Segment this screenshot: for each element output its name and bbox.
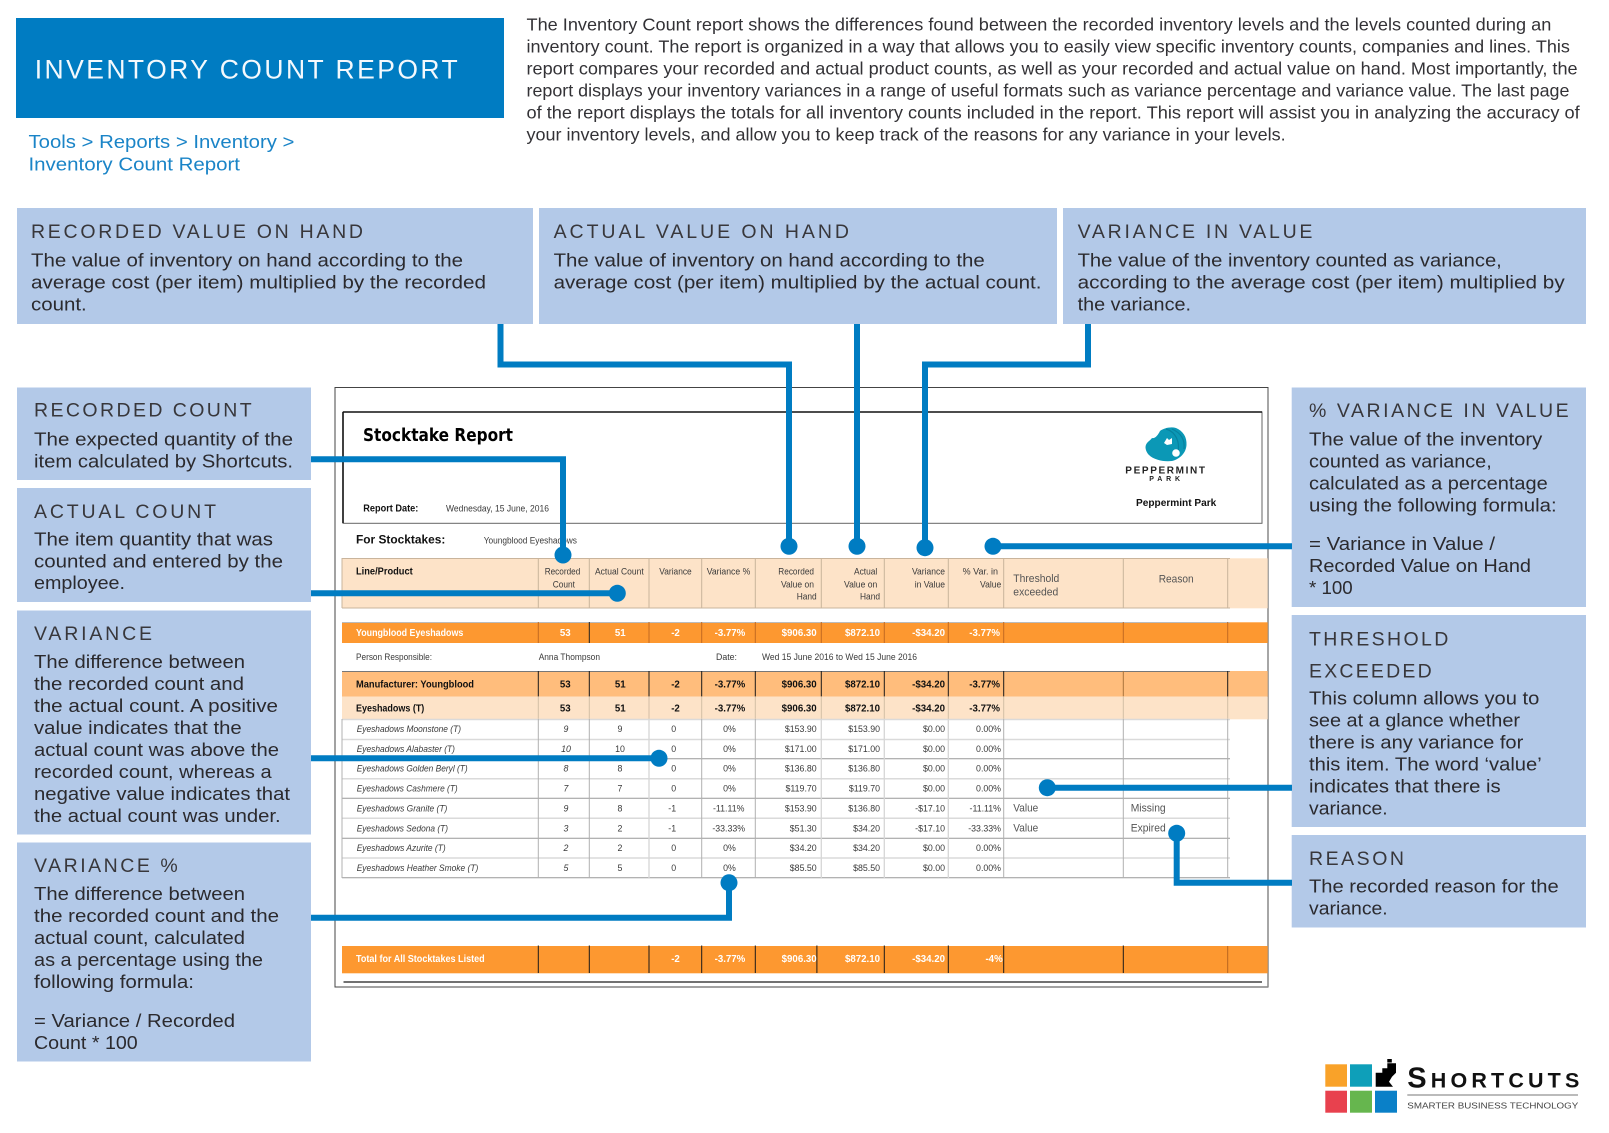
arrow: recorded value on hand xyxy=(500,324,798,555)
description: recorded value on hand: count. xyxy=(31,294,87,314)
manufacturer row: 53 xyxy=(560,680,571,691)
description: variance: value indicates that the xyxy=(34,718,242,738)
description: threshold exceeded: this item. The word ‘value’ xyxy=(1309,754,1542,774)
group row: youngblood eyeshadows: -3.77% xyxy=(969,628,1000,639)
item: cashmere: Eyeshadows Cashmere (T) xyxy=(357,784,458,794)
table header row: Actual xyxy=(854,567,877,577)
breadcrumb navigation path: Tools > Reports > Inventory > xyxy=(28,132,294,152)
item: sedona: -1 xyxy=(668,824,676,834)
item: cashmere: $0.00 xyxy=(923,784,945,794)
arrow: threshold exceeded xyxy=(1039,779,1292,796)
manufacturer row: $906.30 xyxy=(782,680,817,691)
intro paragraph: of the report displays the totals for all inventory counts included in the report. This report will assist you in analyzing the accuracy of xyxy=(526,102,1580,122)
description: variance percent: following formula: xyxy=(34,972,194,992)
description: reason: variance. xyxy=(1309,899,1388,919)
description: variance percent: The difference between xyxy=(34,884,245,904)
total row: -2 xyxy=(671,954,680,965)
item: alabaster: $171.00 xyxy=(848,744,880,754)
item: heather smoke: $85.50 xyxy=(853,863,880,873)
tagline: SMARTER BUSINESS TECHNOLOGY xyxy=(1407,1100,1579,1110)
breadcrumb navigation path xyxy=(28,132,294,174)
for stocktakes line xyxy=(356,532,578,546)
manufacturer row: -2 xyxy=(671,680,680,691)
description: variance: the recorded count and xyxy=(34,674,244,694)
item: cashmere: $119.70 xyxy=(849,784,880,794)
description: threshold exceeded: This column allows you to xyxy=(1309,688,1539,708)
item: granite: 9 xyxy=(564,804,569,814)
panel: recorded value on hand xyxy=(17,208,533,324)
arrow: variance xyxy=(311,750,668,767)
heading: threshold exceeded: EXCEEDED xyxy=(1309,660,1432,682)
item: azurite: $34.20 xyxy=(790,843,817,853)
description: reason: The recorded reason for the xyxy=(1309,877,1559,897)
item: granite: $153.90 xyxy=(785,804,817,814)
description: actual count: employee. xyxy=(34,573,125,593)
item: moonstone: 0 xyxy=(671,724,676,734)
item: sedona: $34.20 xyxy=(853,824,880,834)
item: alabaster: $171.00 xyxy=(785,744,817,754)
item: moonstone: $153.90 xyxy=(785,724,817,734)
item: azurite: 2 xyxy=(563,843,569,853)
description: percent variance in value: counted as variance, xyxy=(1309,451,1492,471)
heading: reason: REASON xyxy=(1309,848,1404,870)
group row: youngblood eyeshadows: -2 xyxy=(671,628,680,639)
arrow: recorded count xyxy=(311,459,572,564)
person responsible row xyxy=(356,652,917,662)
description: variance: negative value indicates that xyxy=(34,784,290,804)
item: heather smoke xyxy=(357,863,1001,873)
item: alabaster: $0.00 xyxy=(923,744,945,754)
person responsible row: Wed 15 June 2016 to Wed 15 June 2016 xyxy=(762,652,917,662)
item: azurite: $0.00 xyxy=(923,843,945,853)
panel: variance percent xyxy=(17,842,311,1062)
table header row: Count xyxy=(553,579,576,589)
item: moonstone: 9 xyxy=(618,724,623,734)
person responsible row: Person Responsible: xyxy=(356,652,432,662)
heading: variance in value: VARIANCE IN VALUE xyxy=(1078,221,1312,243)
table header row: Variance xyxy=(659,567,692,577)
item: sedona: -33.33% xyxy=(712,824,745,834)
intro paragraph: The Inventory Count report shows the differences found between the recorded inventory levels and the levels counted during an xyxy=(526,14,1551,34)
item: heather smoke: 0.00% xyxy=(976,863,1001,873)
report date: Report Date: xyxy=(363,504,418,515)
item: azurite: 2 xyxy=(618,843,623,853)
item: golden beryl: 0% xyxy=(723,764,736,774)
description: variance percent xyxy=(34,884,279,1053)
item: golden beryl: 0.00% xyxy=(976,764,1001,774)
item: cashmere xyxy=(357,784,1001,794)
report date xyxy=(363,504,549,515)
description: recorded count: The expected quantity of the xyxy=(34,430,293,450)
group row: youngblood eyeshadows xyxy=(342,622,1268,643)
description: actual value on hand xyxy=(554,250,1042,292)
heading: actual value on hand: ACTUAL VALUE ON HAND xyxy=(554,221,849,243)
table header row xyxy=(342,558,1268,608)
item: azurite xyxy=(357,843,1001,853)
item: sedona: 3 xyxy=(564,824,569,834)
description: actual value on hand: average cost (per item) multiplied by the actual count. xyxy=(554,272,1042,292)
panel: threshold exceeded xyxy=(1292,615,1586,827)
description: variance in value: the variance. xyxy=(1078,294,1191,314)
manufacturer row: $872.10 xyxy=(845,680,880,691)
report date: Wednesday, 15 June, 2016 xyxy=(446,504,549,514)
panel: recorded count xyxy=(17,388,311,480)
item: golden beryl: 8 xyxy=(564,764,569,774)
group row: youngblood eyeshadows: Youngblood Eyeshadows xyxy=(356,628,463,639)
item: alabaster: 0.00% xyxy=(976,744,1001,754)
intro paragraph: your inventory levels, and allow you to keep track of the reasons for any variance in your levels. xyxy=(526,124,1286,144)
item: golden beryl: $136.80 xyxy=(848,764,880,774)
table header row: % Var. in xyxy=(963,567,998,577)
breadcrumb navigation path: Inventory Count Report xyxy=(28,154,240,174)
report screenshot: stocktake report xyxy=(335,388,1268,987)
total row: Total for All Stocktakes Listed xyxy=(356,954,485,965)
description: threshold exceeded: indicates that there is xyxy=(1309,776,1501,796)
item: heather smoke: 0 xyxy=(671,863,676,873)
item: moonstone xyxy=(357,724,1001,734)
total row xyxy=(342,946,1268,973)
description: variance percent: actual count, calculated xyxy=(34,928,245,948)
total row: -4% xyxy=(985,954,1003,965)
icon: peppermint park logo: PARK xyxy=(1149,476,1180,483)
report header box xyxy=(343,412,1262,523)
heading: percent variance in value: % VARIANCE IN VALUE xyxy=(1309,400,1569,422)
description: percent variance in value: using the following formula: xyxy=(1309,495,1557,515)
description: reason xyxy=(1309,877,1559,919)
arrow: variance percent xyxy=(311,874,738,918)
description: variance in value xyxy=(1078,250,1566,314)
description: threshold exceeded: variance. xyxy=(1309,798,1388,818)
item: heather smoke: $0.00 xyxy=(923,863,945,873)
category row: eyeshadows: 53 xyxy=(560,703,571,714)
description: threshold exceeded xyxy=(1309,688,1542,818)
table header row: Value xyxy=(980,579,1001,589)
table header row: Variance % xyxy=(707,567,750,577)
table header row: Threshold xyxy=(1013,573,1059,585)
table header row: Hand xyxy=(860,592,880,602)
total row: $906.30 xyxy=(782,954,817,965)
icon: peppermint park logo: Peppermint Park xyxy=(1136,498,1217,509)
panel: variance in value xyxy=(1063,208,1586,324)
item: golden beryl: 8 xyxy=(618,764,623,774)
item: alabaster: 10 xyxy=(561,744,571,754)
table header row: Actual Count xyxy=(595,567,644,577)
group row: youngblood eyeshadows: 51 xyxy=(615,628,626,639)
item: sedona: -$17.10 xyxy=(915,824,945,834)
category row: eyeshadows: $872.10 xyxy=(845,703,880,714)
description: percent variance in value: * 100 xyxy=(1309,578,1353,598)
item: sedona: Expired xyxy=(1131,822,1166,834)
manufacturer row xyxy=(342,671,1268,697)
report title: Stocktake Report xyxy=(363,425,513,446)
item: sedona: -33.33% xyxy=(968,824,1001,834)
item: cashmere: $119.70 xyxy=(786,784,817,794)
item: golden beryl: $0.00 xyxy=(923,764,945,774)
manufacturer row: -3.77% xyxy=(715,680,746,691)
table header row: Value on xyxy=(844,579,877,589)
intro paragraph: inventory count. The report is organized in a way that allows you to easily view specific inventory counts, companies and lines. This xyxy=(526,36,1570,56)
item: azurite: 0% xyxy=(723,843,736,853)
item: sedona: Eyeshadows Sedona (T) xyxy=(357,824,448,834)
description: actual value on hand: The value of inventory on hand according to the xyxy=(554,250,985,270)
item: granite: 8 xyxy=(618,804,623,814)
description: percent variance in value: calculated as a percentage xyxy=(1309,473,1548,493)
panel: variance xyxy=(17,610,311,834)
item: granite: $136.80 xyxy=(848,804,880,814)
description: variance percent: = Variance / Recorded xyxy=(34,1011,235,1031)
total row: $872.10 xyxy=(845,954,880,965)
for stocktakes line: For Stocktakes: xyxy=(356,532,445,546)
item: alabaster: 0% xyxy=(723,744,736,754)
heading: recorded count: RECORDED COUNT xyxy=(34,400,252,422)
category row: eyeshadows: 51 xyxy=(615,703,626,714)
description: actual count xyxy=(34,529,283,593)
table header row: Reason xyxy=(1159,573,1194,585)
item: granite: -11.11% xyxy=(713,804,745,814)
description: actual count: The item quantity that was xyxy=(34,529,273,549)
item: azurite: $34.20 xyxy=(853,843,880,853)
intro paragraph xyxy=(526,14,1580,144)
heading: threshold exceeded: THRESHOLD xyxy=(1309,628,1448,650)
description: variance percent: Count * 100 xyxy=(34,1033,138,1053)
item: moonstone: 0.00% xyxy=(976,724,1001,734)
description: variance percent: as a percentage using the xyxy=(34,950,263,970)
item rows xyxy=(342,719,1230,878)
item: granite: Value xyxy=(1013,802,1038,814)
arrow: actual count xyxy=(311,585,626,602)
description: variance in value: according to the average cost (per item) multiplied by xyxy=(1078,272,1566,292)
logo: shortcuts xyxy=(1325,1059,1579,1113)
heading: variance percent: VARIANCE % xyxy=(34,855,178,877)
description: threshold exceeded: see at a glance whether xyxy=(1309,710,1520,730)
heading: threshold exceeded xyxy=(1309,628,1448,682)
item: granite: Eyeshadows Granite (T) xyxy=(357,804,447,814)
item: sedona: $51.30 xyxy=(790,824,817,834)
description: percent variance in value: = Variance in Value / xyxy=(1309,534,1496,554)
person responsible row: Date: xyxy=(716,652,737,662)
item: heather smoke: 5 xyxy=(618,863,623,873)
description: recorded count: item calculated by Shortcuts. xyxy=(34,452,293,472)
heading: actual count: ACTUAL COUNT xyxy=(34,501,216,523)
category row: eyeshadows: -3.77% xyxy=(969,703,1000,714)
group row: youngblood eyeshadows: $906.30 xyxy=(782,628,817,639)
group row: youngblood eyeshadows: $872.10 xyxy=(845,628,880,639)
item: heather smoke: 0% xyxy=(723,863,736,873)
description: variance: the actual count was under. xyxy=(34,806,281,826)
table header row: Value on xyxy=(781,579,814,589)
item: azurite: 0 xyxy=(671,843,676,853)
panel: reason xyxy=(1292,835,1586,928)
group row: youngblood eyeshadows: 53 xyxy=(560,628,571,639)
description: recorded value on hand: average cost (per item) multiplied by the recorded xyxy=(31,272,486,292)
total row: -3.77% xyxy=(715,954,746,965)
arrow: reason xyxy=(1168,825,1292,883)
icon: peppermint park logo xyxy=(1125,427,1217,509)
heading: variance: VARIANCE xyxy=(34,623,152,645)
item: golden beryl: Eyeshadows Golden Beryl (T) xyxy=(357,764,468,774)
table header row: exceeded xyxy=(1013,586,1058,598)
category row: eyeshadows: -2 xyxy=(671,703,680,714)
item: cashmere: 7 xyxy=(618,784,623,794)
item: alabaster: Eyeshadows Alabaster (T) xyxy=(357,744,455,754)
table header row: Variance xyxy=(912,567,945,577)
description: variance: recorded count, whereas a xyxy=(34,762,273,782)
description: recorded value on hand: The value of inventory on hand according to the xyxy=(31,250,463,270)
panel: actual value on hand xyxy=(539,208,1057,324)
item: alabaster: 0 xyxy=(671,744,676,754)
item: alabaster xyxy=(357,744,1001,754)
description: variance in value: The value of the inventory counted as variance, xyxy=(1078,250,1502,270)
item: golden beryl: 0 xyxy=(671,764,676,774)
item: cashmere: 0% xyxy=(723,784,736,794)
item: moonstone: Eyeshadows Moonstone (T) xyxy=(357,724,461,734)
wordmark: SHORTCUTS xyxy=(1407,1063,1579,1095)
item: azurite: Eyeshadows Azurite (T) xyxy=(357,843,446,853)
panel: percent variance in value xyxy=(1292,388,1586,607)
connectors: callout lines linking panels to report columns xyxy=(311,324,1292,918)
item: sedona: Value xyxy=(1013,822,1038,834)
group row: youngblood eyeshadows: -3.77% xyxy=(715,628,746,639)
description: percent variance in value xyxy=(1309,429,1557,598)
item: moonstone: 9 xyxy=(564,724,569,734)
icon: coloured squares and stairs mark xyxy=(1325,1059,1397,1113)
table header row: Line/Product xyxy=(356,567,413,578)
item: moonstone: $0.00 xyxy=(923,724,945,734)
table header row: Hand xyxy=(797,592,817,602)
arrow: actual value on hand xyxy=(848,324,866,555)
title banner xyxy=(16,18,504,118)
table header row: in Value xyxy=(915,579,945,589)
description: variance: the actual count. A positive xyxy=(34,696,278,716)
item: sedona: 2 xyxy=(618,824,623,834)
item: granite: -$17.10 xyxy=(915,804,945,814)
item: azurite: 0.00% xyxy=(976,843,1001,853)
item: granite: -11.11% xyxy=(970,804,1001,814)
item: sedona xyxy=(357,822,1166,834)
description: variance percent: the recorded count and the xyxy=(34,906,279,926)
item: heather smoke: Eyeshadows Heather Smoke (T) xyxy=(357,863,478,873)
item: heather smoke: 5 xyxy=(564,863,569,873)
category row: eyeshadows: -3.77% xyxy=(715,703,746,714)
item: granite xyxy=(357,802,1166,814)
panel: actual count xyxy=(17,488,311,602)
icon: peppermint park logo: PEPPERMINT xyxy=(1125,466,1205,477)
item: moonstone: 0% xyxy=(723,724,736,734)
item: cashmere: 0 xyxy=(671,784,676,794)
description: percent variance in value: The value of the inventory xyxy=(1309,429,1543,449)
item: granite: Missing xyxy=(1131,802,1166,814)
item: alabaster: 10 xyxy=(615,744,625,754)
group row: youngblood eyeshadows: -$34.20 xyxy=(912,628,945,639)
manufacturer row: -$34.20 xyxy=(912,680,945,691)
total row: -$34.20 xyxy=(912,954,945,965)
arrow: variance in value xyxy=(916,324,1088,556)
heading: recorded value on hand: RECORDED VALUE ON HAND xyxy=(31,221,363,243)
item: golden beryl xyxy=(357,764,1001,774)
category row: eyeshadows xyxy=(342,697,1268,719)
description: variance xyxy=(34,652,290,826)
item: heather smoke: $85.50 xyxy=(790,863,817,873)
arrow: percent variance in value xyxy=(984,538,1292,555)
table header row: Recorded xyxy=(545,567,580,577)
description: actual count: counted and entered by the xyxy=(34,551,283,571)
description: threshold exceeded: there is any variance for xyxy=(1309,732,1523,752)
item: cashmere: 0.00% xyxy=(976,784,1001,794)
for stocktakes line: Youngblood Eyeshadows xyxy=(484,535,578,545)
intro paragraph: report compares your recorded and actual product counts, as well as your recorded and actual value on hand. Most importantly, the xyxy=(526,58,1578,78)
category row: eyeshadows: Eyeshadows (T) xyxy=(356,703,424,714)
item: granite: -1 xyxy=(668,804,676,814)
description: recorded value on hand xyxy=(31,250,486,314)
description: variance: The difference between xyxy=(34,652,245,672)
manufacturer row: -3.77% xyxy=(969,680,1000,691)
category row: eyeshadows: -$34.20 xyxy=(912,703,945,714)
table header row: Recorded xyxy=(778,567,814,577)
title banner: INVENTORY COUNT REPORT xyxy=(35,55,458,85)
item: cashmere: 7 xyxy=(564,784,570,794)
manufacturer row: 51 xyxy=(615,680,626,691)
intro paragraph: report displays your inventory variances in a range of useful formats such as variance percentage and variance value. The last page xyxy=(526,80,1569,100)
description: recorded count xyxy=(34,430,293,472)
description: variance: actual count was above the xyxy=(34,740,279,760)
manufacturer row: Manufacturer: Youngblood xyxy=(356,680,474,691)
item: golden beryl: $136.80 xyxy=(785,764,817,774)
item: moonstone: $153.90 xyxy=(848,724,880,734)
person responsible row: Anna Thompson xyxy=(539,652,600,662)
category row: eyeshadows: $906.30 xyxy=(782,703,817,714)
description: percent variance in value: Recorded Value on Hand xyxy=(1309,556,1531,576)
